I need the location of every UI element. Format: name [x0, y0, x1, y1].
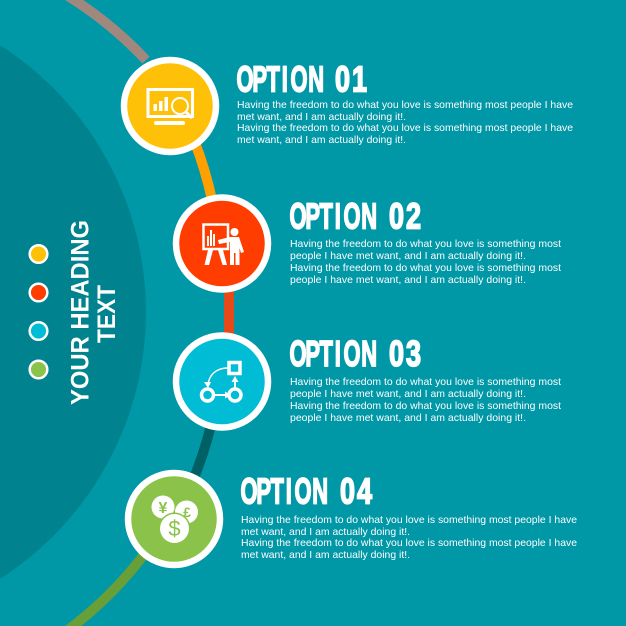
option 2 text: people I have met want, and I am actually doing it!.	[290, 250, 526, 262]
option 4 title: 04	[340, 471, 372, 511]
option 1 circle	[124, 60, 216, 152]
icon: presenter at board	[204, 224, 244, 265]
icon: currency coins: $	[168, 516, 181, 541]
option 3 text: Having the freedom to do what you love is something most	[290, 376, 561, 388]
option 2 circle	[176, 198, 268, 290]
option 1 text	[237, 99, 573, 146]
option 3 text: people I have met want, and I am actually doing it!.	[290, 388, 526, 400]
icon: monitor with magnifier	[148, 90, 192, 125]
option 1 title: 01	[335, 59, 367, 99]
option 3 text	[290, 376, 561, 424]
option 2 title: OPTION	[290, 197, 377, 237]
option 4 title: OPTION	[240, 472, 328, 512]
icon: currency coins: £	[183, 504, 191, 520]
option 2 text: Having the freedom to do what you love is something most	[290, 262, 561, 274]
option 4 text: Having the freedom to do what you love is something most people I have	[241, 514, 577, 526]
option 4 text: met want, and I am actually doing it!.	[241, 549, 410, 561]
option 2 title	[290, 196, 421, 237]
option 2 text: Having the freedom to do what you love is something most	[290, 238, 561, 250]
option 3 title: OPTION	[290, 334, 377, 374]
icon: workflow diagram	[202, 362, 241, 401]
option 4 circle	[128, 473, 220, 565]
option 1 text: met want, and I am actually doing it!.	[237, 111, 406, 123]
option 4 title	[240, 471, 372, 512]
option 1 title	[236, 59, 367, 100]
option 1 title: OPTION	[236, 60, 324, 100]
option 1 text: met want, and I am actually doing it!.	[237, 134, 406, 146]
option 3 title: 03	[389, 333, 421, 374]
icon: currency coins: ¥	[159, 500, 168, 517]
panel: left dark circle	[0, 0, 146, 626]
option 3 title	[290, 333, 421, 374]
option 2 title: 02	[389, 196, 421, 236]
icon: currency coins	[152, 496, 198, 544]
curved timeline	[68, 0, 229, 626]
option 3 text: Having the freedom to do what you love is something most	[290, 400, 561, 412]
option 4 text: Having the freedom to do what you love is something most people I have	[241, 537, 577, 549]
heading: YOUR HEADING	[66, 220, 94, 405]
option 1 text: Having the freedom to do what you love is something most people I have	[237, 99, 573, 111]
option 1 text: Having the freedom to do what you love is something most people I have	[237, 122, 573, 134]
heading: TEXT	[93, 285, 121, 343]
option 3 circle	[176, 336, 268, 428]
legend dots	[30, 245, 47, 378]
heading	[66, 220, 121, 405]
option 2 text	[290, 238, 561, 286]
option 3 text: people I have met want, and I am actually doing it!.	[290, 412, 526, 424]
option 4 text	[241, 514, 577, 561]
option 4 text: met want, and I am actually doing it!.	[241, 526, 410, 538]
option 2 text: people I have met want, and I am actually doing it!.	[290, 274, 526, 286]
